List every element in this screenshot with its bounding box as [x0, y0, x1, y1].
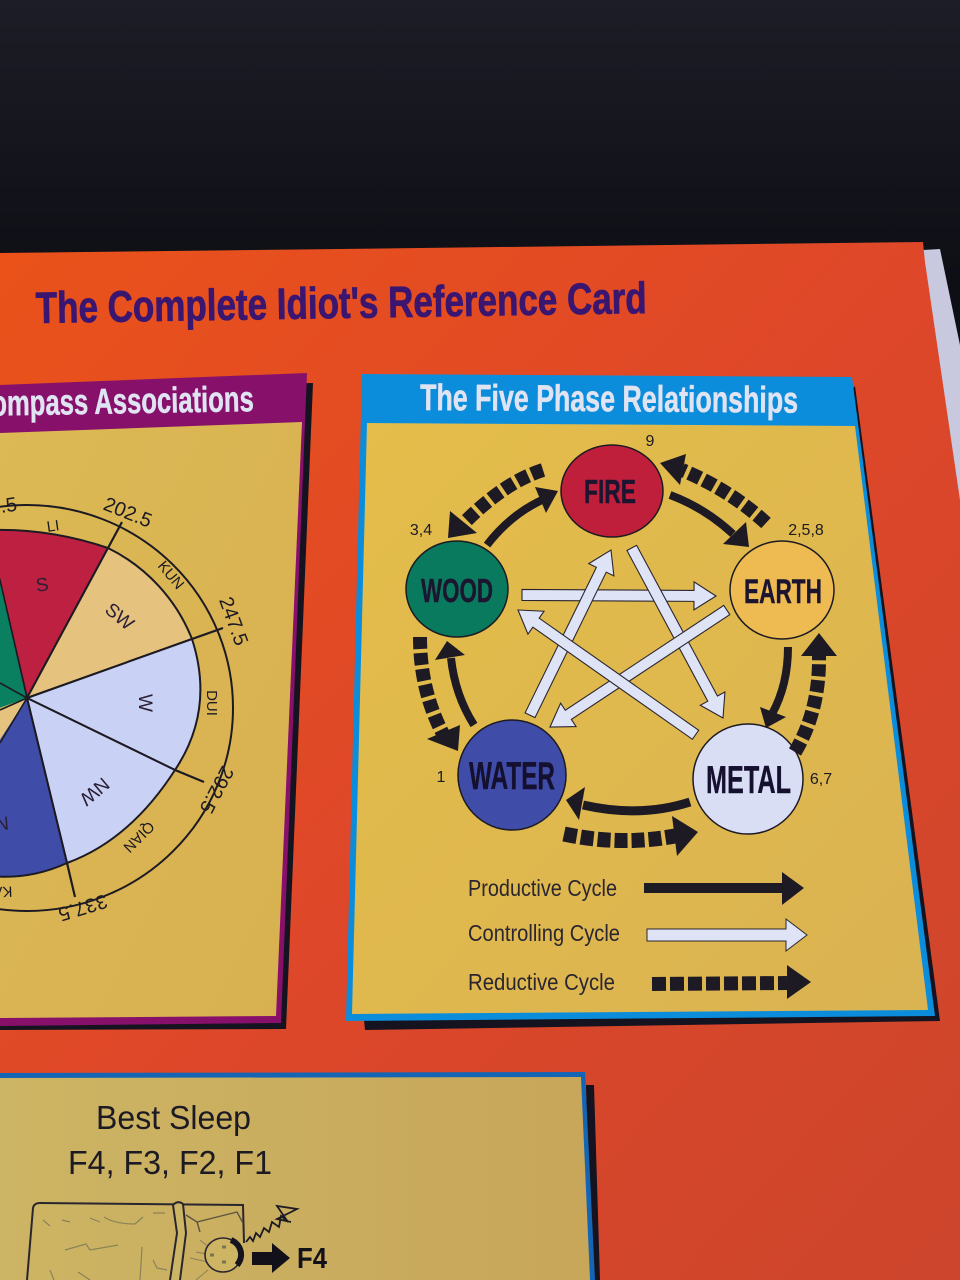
direction labels — [0, 574, 155, 834]
direction labels: S — [34, 574, 50, 597]
reductive cycle arrows — [420, 454, 837, 856]
dark background — [0, 0, 960, 540]
phase numbers: 6,7 — [810, 771, 832, 788]
phase circle: fire: FIRE — [584, 473, 636, 510]
best sleep heading: Best Sleep — [96, 1099, 251, 1136]
degree labels: 292.5 — [195, 762, 238, 817]
legend: reductive cycle — [468, 965, 811, 999]
trigram labels: KUN — [154, 558, 187, 593]
phase numbers: 1 — [437, 769, 446, 786]
phase numbers — [410, 433, 832, 788]
phase circle: metal: METAL — [706, 759, 791, 802]
legend: productive cycle: Productive Cycle — [468, 875, 617, 901]
five phase heading: The Five Phase Relationships — [420, 377, 798, 421]
compass wheel — [0, 493, 252, 925]
direction labels: SW — [101, 599, 138, 635]
trigram labels: QIAN — [120, 818, 158, 856]
legend: controlling cycle: Controlling Cycle — [468, 920, 620, 946]
panel: compass associations — [0, 373, 313, 1030]
phase numbers: 9 — [646, 433, 655, 450]
legend: reductive cycle: Reductive Cycle — [468, 969, 615, 995]
panel: five phase relationships — [346, 374, 940, 1030]
legend: controlling cycle — [468, 919, 807, 951]
direction labels: NW — [75, 773, 113, 809]
phase circle: wood — [406, 541, 508, 637]
phase circle: earth: EARTH — [744, 573, 822, 611]
trigram labels: LI — [46, 517, 60, 536]
phase circle: fire — [561, 445, 663, 537]
direction labels: W — [134, 694, 155, 712]
trigram labels — [0, 517, 220, 901]
productive cycle arrows — [435, 487, 788, 820]
F4 label: F4 — [297, 1243, 327, 1275]
degree labels: 247.5 — [214, 594, 252, 649]
illustration: person sleeping in bed — [27, 1202, 297, 1280]
phase circle: metal — [693, 724, 803, 834]
phase circle: earth — [730, 541, 834, 639]
phase numbers: 3,4 — [410, 522, 432, 539]
best sleep floors: F4, F3, F2, F1 — [68, 1144, 272, 1181]
degree labels — [0, 493, 252, 925]
degree labels: 337.5 — [56, 889, 110, 925]
trigram labels: DUI — [203, 690, 220, 716]
title: The Complete Idiot's Reference Card — [35, 274, 647, 333]
degree labels: 202.5 — [100, 493, 155, 533]
phase numbers: 2,5,8 — [788, 522, 824, 539]
phase circle: wood: WOOD — [421, 572, 493, 609]
white page stack at right edge — [923, 249, 960, 530]
legend: productive cycle — [468, 872, 804, 905]
phase circle: water: WATER — [469, 755, 555, 798]
panel: best sleep — [0, 1072, 600, 1280]
controlling cycle arrows — [510, 541, 735, 746]
arrow to F4 — [252, 1243, 290, 1273]
phase circle: water — [458, 720, 566, 830]
